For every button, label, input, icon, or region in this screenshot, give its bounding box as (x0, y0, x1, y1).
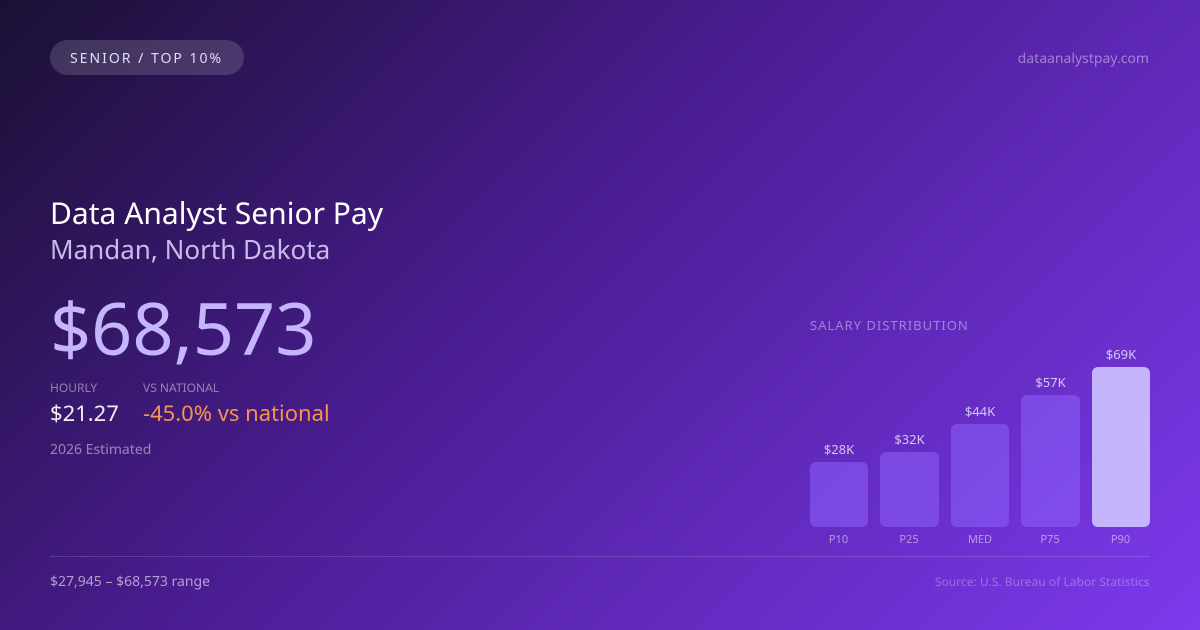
bar: P90 (1092, 367, 1150, 527)
hourly value: $21.27 (50, 398, 119, 428)
bar: P75 (1021, 395, 1080, 527)
badge label: SENIOR / TOP 10% (70, 49, 223, 68)
bar: P25 (880, 452, 939, 527)
estimate note: 2026 Estimated (50, 440, 151, 459)
chart heading: SALARY DISTRIBUTION (810, 316, 969, 334)
axis label: P75: P75 (1040, 532, 1060, 547)
badge: senior / top 10% (50, 40, 244, 75)
axis label: P25: P25 (899, 532, 919, 547)
bar: median (951, 424, 1009, 527)
source: Source: U.S. Bureau of Labor Statistics (935, 573, 1150, 590)
axis label: median: MED (968, 532, 992, 547)
title: Data Analyst Senior Pay (50, 192, 383, 233)
vs national label: VS NATIONAL (143, 379, 219, 396)
bar: P10 (810, 462, 868, 527)
axis label: P10: P10 (829, 532, 848, 547)
bar chart: salary distribution (810, 316, 1150, 547)
stat: vs national (143, 379, 330, 428)
value: P90: $69K (1106, 345, 1136, 363)
value: median: $44K (965, 402, 995, 420)
hourly label: HOURLY (50, 379, 97, 396)
site domain: dataanalystpay.com (1018, 49, 1149, 68)
salary range: $27,945 – $68,573 range (50, 572, 210, 591)
headline salary: $68,573 (50, 279, 316, 377)
axis label: P90: P90 (1111, 532, 1130, 547)
value: P75: $57K (1035, 373, 1066, 391)
value: P10: $28K (824, 440, 854, 458)
value: P25: $32K (894, 430, 925, 448)
vs national value: -45.0% vs national (143, 398, 330, 428)
subtitle: location: Mandan, North Dakota (50, 231, 330, 267)
stat: hourly (50, 379, 119, 428)
